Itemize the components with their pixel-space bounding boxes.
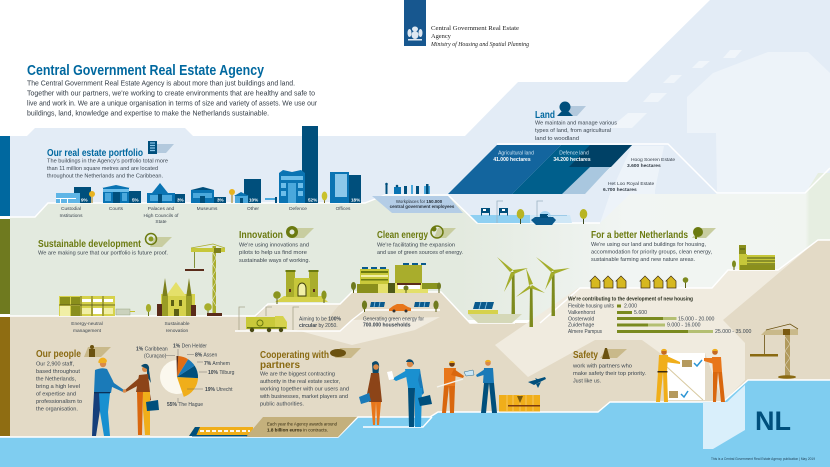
pie labels	[136, 344, 235, 408]
circular callout	[299, 316, 342, 329]
section stripes	[0, 136, 10, 436]
label: sustainable renovation: Sustainable	[164, 321, 190, 327]
icon: office building	[148, 141, 174, 154]
chart: new housing development: 5.600	[634, 310, 647, 316]
contracts callout	[246, 417, 357, 437]
pie labels: 55% The Hague	[167, 402, 203, 408]
illustration: solar field	[468, 302, 522, 323]
pie labels: 19% Utrecht	[205, 387, 233, 393]
people text: the organisation.	[36, 406, 78, 412]
land scene: cows, lamps, trees, tank	[470, 201, 587, 225]
intro text: live and work in. We are a unique organisation in terms of size and variety of assets. We use our	[27, 98, 317, 108]
heading: cooperating with partners: Cooperating with	[260, 350, 329, 361]
portfolio text: The buildings in the Agency's portfolio total more	[47, 158, 168, 164]
building labels: Palaces and	[148, 206, 175, 212]
land labels: 6.700 hectares	[603, 187, 637, 193]
figure: businesswoman	[125, 364, 159, 435]
building labels: Other	[247, 206, 259, 212]
label: energy-neutral management: Energy-neutral	[71, 321, 103, 327]
intro text: Together with our partners, we're working to create environments that are healthy and safe to	[27, 88, 315, 98]
panel: land	[448, 102, 675, 225]
background: blue portfolio and land zone	[10, 0, 830, 240]
land chart parallelograms: 34.200 hectares	[553, 157, 591, 163]
panel: our people	[36, 344, 357, 437]
label: energy-neutral management: management	[73, 328, 102, 334]
land chart parallelograms: Agricultural land	[498, 150, 534, 156]
illustration: energy-neutral building	[59, 296, 135, 316]
building labels: Offices	[336, 206, 351, 212]
panel: cooperating with partners	[259, 348, 546, 427]
cooperating text: working together with our users and	[259, 386, 349, 392]
illustration: sustainable buildings	[351, 264, 441, 293]
cooperating text: with businesses, market players and	[259, 394, 348, 400]
bar: other 10%	[229, 179, 261, 203]
bar: defence 52%: 52%	[308, 198, 317, 202]
pie labels: (Curaçao)	[144, 354, 167, 360]
people text	[36, 362, 82, 412]
heading: land: Land	[535, 110, 555, 121]
better Netherlands text	[591, 242, 712, 263]
land chart parallelograms: 41.000 hectares	[493, 157, 531, 163]
panel: innovation	[239, 226, 342, 332]
illustration: truck	[239, 307, 299, 332]
pie labels: 10% Tilburg	[208, 370, 235, 376]
land text	[535, 120, 617, 142]
figure: man with document	[387, 359, 432, 427]
portfolio text	[47, 158, 168, 180]
green energy callout: 700.000 households	[363, 322, 411, 328]
chart: new housing development: 2.000	[624, 304, 637, 310]
portfolio text: throughout the Netherlands and the Caribbean.	[47, 174, 163, 180]
circular callout: circular by 2050.	[299, 323, 338, 329]
label: sustainable renovation	[164, 321, 190, 334]
illustration: brown crane	[750, 324, 798, 379]
sustainable text: We are making sure that our portfolio is future proof.	[38, 250, 168, 256]
innovation text: pilots to help us find more	[239, 250, 307, 256]
logo: Central Government Real Estate	[431, 25, 519, 32]
icon: traffic cone	[600, 348, 627, 359]
illustration: crane	[185, 244, 225, 316]
land labels: Het Loo Royal Estate	[608, 181, 654, 187]
clean energy text	[377, 242, 463, 256]
icon: people at work	[385, 183, 430, 194]
innovation text: sustainable ways of working.	[239, 258, 310, 264]
heading: our people: Our people	[36, 349, 81, 360]
illustration: church renovation	[157, 278, 196, 316]
land chart parallelograms: Defence land	[559, 150, 589, 156]
innovation text	[239, 242, 310, 264]
illustration: train	[189, 427, 253, 436]
icon: tree on land	[692, 227, 716, 239]
cooperating text: public authorities.	[260, 402, 304, 408]
heading: cooperating with partners	[260, 350, 329, 371]
figure: blue worker	[476, 360, 497, 413]
green energy callout: Generating green energy for	[363, 316, 424, 322]
background: water	[0, 380, 830, 467]
people text: of expertise and	[36, 392, 76, 398]
illustration: wind turbines	[497, 257, 570, 327]
pie labels: 1% Caribbean	[136, 346, 168, 352]
bar: offices 18%: 18%	[351, 198, 360, 202]
background: tan people zone	[10, 240, 830, 440]
chart: new housing development: Zuiderhage	[568, 323, 594, 329]
icon: tree	[557, 102, 586, 116]
building labels	[60, 206, 351, 225]
panel: clean energy	[351, 226, 570, 328]
panel: sustainable development	[38, 234, 225, 334]
chart: new housing development: 25.000 - 35.000	[715, 329, 751, 335]
bar: museums 3%	[191, 187, 226, 203]
figure: orange worker with laptop	[437, 361, 474, 413]
cooperating text	[259, 372, 349, 408]
portfolio text: than 11 million square metres and are located	[47, 166, 158, 172]
pie chart: staff by location	[136, 344, 235, 408]
logo: Agency	[431, 33, 452, 40]
bar: other 10%: 10%	[249, 198, 258, 202]
intro text	[27, 78, 317, 118]
safety text: make safety their top priority.	[573, 371, 646, 377]
bar: defence 52%	[265, 126, 318, 203]
land labels	[603, 157, 675, 193]
illustration: shipping crates	[499, 395, 540, 412]
building labels: Defence	[289, 206, 307, 212]
chart: new housing development: 9.000 - 16.000	[667, 323, 701, 329]
better Netherlands text: We're using our land and buildings for housing,	[591, 242, 706, 248]
icon: gear	[286, 226, 314, 238]
building labels: Courts	[109, 206, 124, 212]
chart: new housing development: Valkenhorst	[568, 310, 596, 316]
panel: real estate portfolio	[47, 126, 463, 225]
people text: based throughout	[36, 369, 80, 375]
bar: offices 18%	[330, 172, 361, 203]
intro text: buildings, land, knowledge and expertise to make the Netherlands sustainable.	[27, 108, 269, 118]
white boundary lines	[0, 144, 830, 437]
land labels: Hoog Soeren Estate	[631, 157, 675, 163]
land text: types of land, from agricultural	[535, 128, 611, 134]
heading: safety: Safety	[573, 350, 598, 361]
illustration: handshake	[92, 358, 159, 436]
people text: the Netherlands,	[36, 376, 76, 382]
land chart parallelograms	[448, 145, 632, 194]
pie labels: 8% Assen	[195, 352, 217, 358]
workplaces callout: Workplaces for 150.000	[396, 199, 443, 204]
illustration: houses	[590, 276, 676, 288]
innovation text: We're using innovations and	[239, 242, 309, 248]
bar: palaces 3%: 3%	[177, 198, 184, 202]
figure: safety man	[656, 349, 680, 402]
bar: courts 5%: 5%	[132, 198, 139, 202]
workplaces callout	[372, 183, 463, 213]
bar: custodial institutions 9%	[56, 187, 95, 203]
panel: for a better Netherlands	[568, 227, 775, 335]
contracts callout: 1.8 billion euros in contracts.	[267, 428, 328, 432]
building labels: Museums	[197, 206, 218, 212]
safety text: work with partners who	[572, 364, 632, 370]
footer note: This is a Central Government Real Estate Agency publication | May 2019	[711, 457, 815, 461]
panel: safety	[572, 324, 798, 449]
bar: custodial institutions 9%: 9%	[81, 198, 88, 202]
contracts callout: Each year the Agency awards around	[267, 422, 337, 426]
clean energy text: We're facilitating the expansion	[377, 242, 455, 248]
logo	[404, 0, 529, 48]
people text: bring a high level	[36, 384, 80, 390]
icon: tree	[322, 192, 327, 203]
bar: courts 5%	[102, 185, 141, 203]
chart: new housing development: Almere Pampus	[568, 329, 602, 335]
label: energy-neutral management	[71, 321, 103, 334]
bar: palaces 3%	[147, 183, 185, 203]
cooperating text: authority in the real estate sector,	[260, 379, 340, 385]
icon: leaf globe	[431, 226, 456, 238]
building labels: State	[155, 219, 167, 225]
icon: recycle gear	[146, 234, 172, 247]
label: sustainable renovation: renovation	[166, 328, 189, 334]
illustration: castle	[273, 270, 328, 304]
chart: new housing development: We're contributing to the development of new housing	[568, 296, 693, 302]
figure: safety woman	[704, 349, 725, 402]
icon: people	[84, 345, 111, 357]
chart: new housing development: Flexible housing units	[568, 304, 614, 310]
background: green sustainability zone	[10, 173, 830, 320]
building labels: High Councils of	[144, 213, 179, 219]
chart: new housing development: 15.000 - 20.000	[678, 316, 714, 322]
safety text: Just like us.	[573, 378, 601, 384]
circular callout: Aiming to be 100%	[299, 316, 342, 322]
better Netherlands text: accommodation for priority groups, clean energy,	[591, 250, 712, 256]
heading: innovation: Innovation	[239, 230, 283, 241]
label: NL: NL	[755, 406, 791, 436]
title: Central Government Real Estate Agency	[27, 63, 264, 79]
safety text	[572, 364, 646, 384]
bar: museums 3%: 3%	[217, 198, 224, 202]
chart: new housing development	[568, 296, 751, 335]
building labels: Custodial	[61, 206, 81, 212]
people text: Our 2,900 staff,	[36, 362, 74, 368]
pie labels: 7% Arnhem	[204, 361, 230, 367]
people text: professionalism to	[36, 399, 82, 405]
heading: for a better Netherlands: For a better Netherlands	[591, 230, 688, 241]
icon: tree	[683, 277, 688, 288]
icon: handshake	[330, 348, 361, 358]
land labels: 3.600 hectares	[627, 163, 661, 169]
heading: clean energy: Clean energy	[377, 230, 428, 241]
icon: airplane	[528, 377, 546, 388]
pie labels: 1% Den Helder	[173, 344, 207, 350]
illustration: solar panels and car	[362, 300, 439, 312]
chart: new housing development: Oosterwold	[568, 316, 594, 322]
heading: cooperating with partners: partners	[260, 360, 300, 371]
cooperating text: We are the biggest contracting	[260, 372, 335, 378]
better Netherlands text: sustainable farming and new nature areas.	[591, 257, 695, 263]
heading: sustainable development: Sustainable development	[38, 239, 142, 250]
figure: man in hard hat	[92, 358, 124, 436]
logo: Ministry of Housing and Spatial Planning	[430, 41, 529, 48]
green energy callout	[363, 316, 424, 328]
heading: our real estate portfolio: Our real estate portfolio	[47, 148, 143, 159]
clean energy text: and use of green sources of energy.	[377, 250, 463, 256]
workplaces callout: central government employees	[390, 204, 455, 209]
intro text: The Central Government Real Estate Agency is about more than just buildings and land.	[27, 78, 295, 88]
building labels: Institutions	[60, 213, 83, 219]
land text: land to woodland	[535, 136, 579, 142]
icon: trees	[146, 303, 212, 316]
checklist board	[667, 353, 745, 449]
land text: We maintain and manage various	[535, 120, 617, 126]
figure: woman with folder	[359, 361, 382, 425]
illustration: building	[732, 245, 775, 270]
